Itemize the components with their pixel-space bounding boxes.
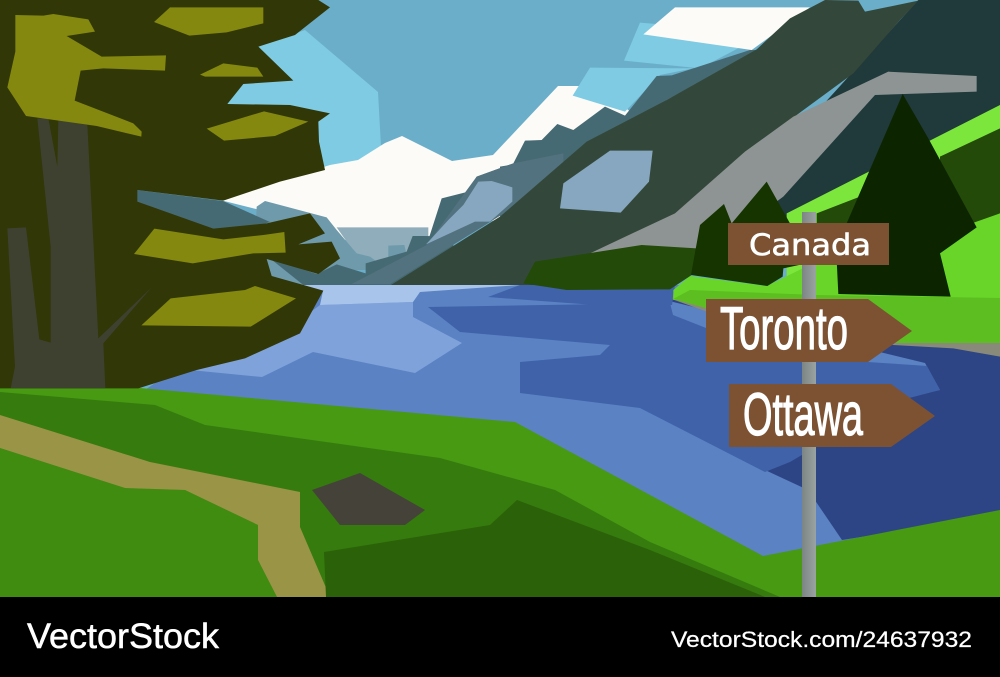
footer bar (0, 597, 1000, 677)
grassy bank (523, 245, 697, 290)
right mountains (390, 0, 1000, 286)
signpost pole (802, 212, 816, 597)
clouds and snowy peaks (220, 7, 810, 240)
leaf highlights (7, 7, 308, 327)
dirt path (0, 415, 330, 597)
footer logo: VectorStock (27, 617, 220, 656)
grey rock ridge (590, 72, 977, 253)
sign: Ottawa: Ottawa (743, 381, 863, 448)
right meadow and trees (523, 94, 1000, 357)
sign: Canada (728, 223, 889, 265)
snow patch on slope (426, 181, 512, 244)
sign: Toronto: Toronto (720, 295, 848, 362)
dark hill (324, 500, 765, 597)
footer id: VectorStock.com/24637932 (671, 627, 972, 652)
large fir tree (837, 94, 977, 297)
foreground grass (0, 388, 1000, 597)
distant mountains (137, 50, 760, 285)
tree (0, 0, 340, 388)
tree foliage (0, 0, 340, 388)
rock (312, 473, 425, 525)
lake (130, 285, 1000, 597)
small fir tree (691, 182, 807, 286)
snow patch on mountain (560, 151, 653, 213)
tree trunk (7, 118, 152, 388)
sign: Canada: Canada (749, 228, 871, 262)
